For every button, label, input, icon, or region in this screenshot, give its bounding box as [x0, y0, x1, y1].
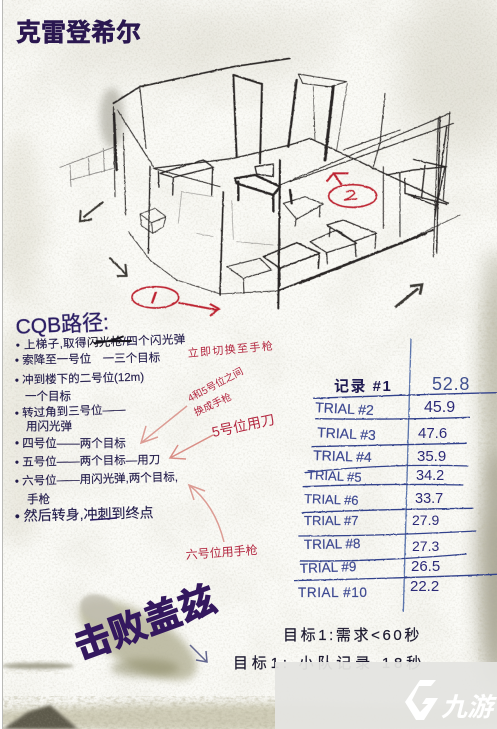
table row 8 — [304, 536, 439, 554]
table row 4: TRIAL #4 — [313, 447, 372, 465]
watermark logo icon — [405, 680, 438, 720]
table row 10 — [298, 578, 439, 600]
table row 5 — [307, 467, 444, 485]
table row 4 — [313, 447, 446, 465]
table row 6: 33.7 — [415, 491, 443, 507]
step 1: • 上梯子,取得闪光枪/四个闪光弹 — [16, 332, 186, 352]
route marker 2 — [327, 173, 377, 207]
step 8: • 然后转身,冲刺到终点 — [15, 504, 154, 524]
table row 8: TRIAL #8 — [304, 536, 361, 552]
step 6: • 五号位——两个目标—用刀 — [15, 452, 160, 469]
ink wash blob — [67, 584, 209, 696]
building sketch — [60, 58, 460, 316]
table row 1: 记录 #1 — [334, 378, 392, 395]
red note: switch to pistol: 立即切换至手枪 — [187, 338, 275, 360]
route step list — [15, 332, 186, 524]
arrow: note to step 5 — [141, 406, 187, 443]
sketch: walls and floor — [60, 58, 460, 308]
step 2: • 索降至一号位 一三个目标 — [15, 350, 160, 367]
step 7: • 六号位——用闪光弹,两个目标, — [15, 470, 178, 488]
table row 3: TRIAL #3 — [317, 424, 376, 443]
table row 3: 47.6 — [418, 425, 447, 442]
table row 9: 26.5 — [411, 558, 440, 575]
step 3: • 冲到楼下的二号位(12m) — [15, 370, 144, 387]
table row 1 — [334, 374, 470, 395]
table row 5: TRIAL #5 — [307, 467, 362, 485]
table row 2 — [315, 399, 455, 418]
arrow: upper left — [80, 202, 103, 221]
sketch: furniture — [140, 159, 447, 293]
red note: knife at 5: 5号位用刀 — [210, 411, 276, 440]
red note: switch between 4 and 5: 换成手枪 — [192, 390, 234, 419]
red note: switch between 4 and 5 — [185, 364, 245, 419]
table row 1: 52.8 — [432, 374, 470, 394]
arrow: lower right — [395, 285, 422, 307]
title: 克雷登希尔 — [16, 19, 141, 47]
red note: pistol at 6: 六号位用手枪 — [185, 542, 258, 562]
heading: CQB route: CQB路径: — [15, 311, 109, 339]
table row 2: 45.9 — [424, 399, 455, 416]
route marker 1 — [132, 287, 219, 316]
table row 4: 35.9 — [417, 448, 446, 465]
table row 7: TRIAL #7 — [304, 513, 358, 528]
arrow: lower left — [109, 257, 127, 276]
table row 2: TRIAL #2 — [315, 399, 374, 418]
watermark text: 九游 — [441, 692, 497, 722]
step 4 continued: 用闪光弹 — [26, 419, 72, 433]
sketch: doors — [233, 74, 347, 163]
step 3 continued: 一个目标 — [25, 390, 71, 403]
table row 9: TRIAL #9 — [300, 559, 357, 576]
step 4: • 转过角到三号位—— — [15, 402, 126, 420]
watermark panel — [275, 662, 497, 729]
table row 3 — [317, 424, 447, 443]
table row 8: 27.3 — [412, 538, 439, 554]
step 7 continued: 手枪 — [27, 492, 50, 506]
table row 6: TRIAL #6 — [304, 491, 359, 508]
red note: switch between 4 and 5: 4和5号位之间 — [185, 364, 245, 405]
defeat Griggs heading: 击败盖兹 — [69, 578, 222, 668]
goal 1: 目标1:需求<60秒 — [283, 627, 422, 644]
arrow: knife note to step 6 — [170, 435, 213, 459]
table row 5: 34.2 — [416, 468, 444, 484]
table row 10: TRIAL #10 — [298, 585, 367, 600]
arrow: pistol note to step 7 — [189, 485, 224, 542]
table row 6 — [304, 491, 443, 508]
table row 7: 27.9 — [412, 512, 439, 528]
table row 7 — [304, 512, 439, 528]
goal 2: 目标1: 小队记录 18秒 — [233, 655, 425, 672]
table row 9 — [300, 558, 440, 576]
table row 10: 22.2 — [410, 578, 439, 595]
arrow: heading to goals — [190, 645, 207, 662]
table rules — [294, 338, 497, 612]
step 5: • 四号位——两个目标 — [15, 436, 126, 450]
trial records table — [294, 338, 497, 612]
